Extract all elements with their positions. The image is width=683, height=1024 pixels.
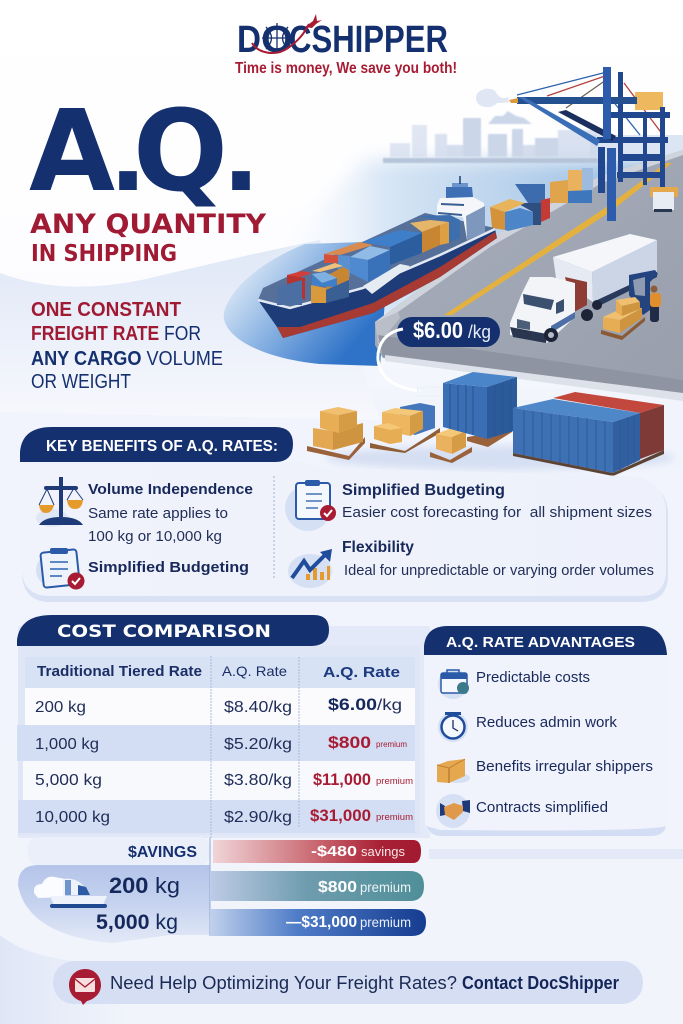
harbour illustration (224, 67, 683, 476)
subtitle: IN SHIPPING (31, 241, 177, 267)
logo swoosh (252, 24, 309, 53)
crane (509, 67, 670, 221)
savings bar (213, 840, 421, 863)
ship containers (277, 215, 460, 305)
advantages header text: A.Q. RATE ADVANTAGES (446, 634, 635, 651)
simplified budgeting heading left: Simplified Budgeting (88, 559, 249, 576)
volume independence heading: Volume Independence (88, 481, 253, 498)
price text: $6.00 (413, 317, 463, 343)
table row 5,000 kg (23, 761, 415, 800)
icon: handshake (436, 794, 470, 828)
quay (375, 150, 683, 401)
benefits header (20, 427, 293, 462)
comparison header text: COST COMPARISON (57, 622, 271, 642)
advantage: contracts simplified: Contracts simplified (476, 800, 608, 816)
premium bar 31,000: premium (360, 914, 411, 930)
title: A (29, 87, 115, 217)
icon: clipboard (36, 548, 84, 590)
volume independence text: Same rate applies to (88, 506, 228, 522)
icon: calendar (438, 669, 469, 699)
table row 1,000 kg: $5.20/kg (224, 736, 292, 753)
dockside containers (490, 168, 593, 231)
container ship (258, 176, 497, 338)
truck (510, 234, 657, 343)
weight rows background (18, 865, 210, 943)
description: ANY CARGO VOLUME (31, 348, 223, 370)
price tag (397, 317, 500, 347)
icon: growth chart (288, 549, 332, 588)
logo wordmark: O (261, 19, 293, 61)
pallets with boxes (307, 403, 512, 463)
trailer (553, 234, 657, 308)
table row 1,000 kg: $800 (328, 733, 371, 752)
200 kg label: 200 kg (109, 873, 180, 898)
table header row (25, 657, 415, 688)
table row 1,000 kg (17, 725, 415, 761)
icon: clipboard right (285, 480, 336, 531)
hook (418, 387, 442, 396)
sea (262, 160, 683, 330)
logo (235, 14, 457, 77)
description: FREIGHT RATE FOR (31, 323, 201, 345)
steam cloud (476, 89, 509, 107)
table header row: A.Q. Rate (222, 663, 287, 679)
table row 1,000 kg: 1,000 kg (35, 736, 99, 753)
small truck on quay (650, 187, 678, 212)
premium bar 31,000 (211, 909, 426, 936)
decorative strip (429, 849, 683, 859)
globe lines (262, 23, 292, 52)
benefits header text: KEY BENEFITS OF A.Q. RATES: (46, 438, 278, 455)
title (29, 87, 260, 217)
table row 200 kg: $8.40/kg (224, 699, 292, 716)
volume independence text: 100 kg or 10,000 kg (88, 529, 222, 545)
comparison header (17, 615, 329, 646)
call to action link: Contact DocShipper (462, 973, 619, 993)
5,000 kg label: 5,000 kg (96, 911, 178, 934)
table row 10,000 kg: premium (376, 812, 413, 822)
subtitle (30, 209, 266, 267)
icon: scales (36, 477, 83, 527)
savings label row: $AVINGS (128, 844, 197, 861)
table row 200 kg: 200 kg (35, 699, 86, 716)
table header row: Traditional Tiered Rate (37, 664, 202, 680)
background wave (0, 240, 380, 420)
logo wordmark (237, 19, 448, 61)
logo wordmark: D (237, 19, 261, 61)
volume independence text (88, 506, 228, 545)
table header row: A.Q. Rate (323, 664, 400, 681)
logo wordmark: CSHIPPER (289, 19, 448, 61)
logo tagline: Time is money, We save you both! (235, 60, 457, 77)
icon: boat and cloud (34, 877, 107, 908)
table row 5,000 kg: 5,000 kg (35, 772, 102, 789)
sea swoosh around bow (224, 240, 420, 366)
ship superstructure (437, 176, 485, 240)
savings label row (28, 837, 210, 865)
cab (510, 277, 575, 343)
premium bar 800 (211, 871, 424, 901)
advantage: reduces admin work: Reduces admin work (476, 715, 618, 731)
panel: cost comparison (17, 615, 430, 838)
table row 5,000 kg: premium (376, 776, 413, 786)
title: . (109, 97, 147, 214)
description (31, 299, 223, 393)
icon: parcel (437, 759, 470, 783)
price unit: /kg (468, 322, 491, 342)
advantage: benefits irregular shippers: Benefits irregular shippers (476, 759, 653, 775)
table row 5,000 kg: $3.80/kg (224, 772, 292, 789)
savings bar: -$480 (311, 843, 357, 860)
description: ONE CONSTANT (31, 299, 181, 321)
large blue container (513, 399, 664, 476)
title: Q (133, 87, 228, 217)
table row 1,000 kg: premium (376, 739, 407, 749)
connector line from price tag to containers (378, 329, 420, 391)
premium bar 800: $800 (318, 879, 357, 896)
advantages header (424, 626, 667, 655)
table row 10,000 kg (18, 800, 415, 833)
savings chart (18, 837, 426, 943)
logo plane (305, 14, 322, 28)
table row 10,000 kg: $2.90/kg (224, 809, 292, 826)
forklift and worker (629, 270, 661, 322)
red container (553, 392, 664, 459)
table row 200 kg (25, 688, 415, 725)
benefits background (22, 462, 668, 602)
sea far band (590, 135, 683, 161)
flexibility text: Ideal for unpredictable or varying order volumes (344, 563, 654, 579)
icon: mail bubble (69, 969, 101, 1005)
call to action text: Need Help Optimizing Your Freight Rates? (110, 973, 457, 993)
savings bar: savings (361, 844, 405, 859)
flexibility heading: Flexibility (342, 539, 414, 556)
skyline (383, 111, 598, 163)
table row 5,000 kg: $11,000 (313, 770, 371, 789)
advantage: predictable costs: Predictable costs (476, 670, 590, 686)
table row 200 kg: $6.00 (328, 695, 377, 714)
simplified budgeting heading right: Simplified Budgeting (342, 482, 505, 499)
subtitle: ANY QUANTITY (30, 209, 266, 240)
background bottom swoosh (0, 935, 130, 1024)
table row 200 kg: /kg (377, 697, 402, 714)
standing blue container (443, 372, 517, 439)
pallet on quay (601, 297, 645, 340)
table row 10,000 kg: $31,000 (310, 806, 371, 825)
premium bar 800: premium (360, 879, 411, 895)
icon: stopwatch (438, 712, 468, 742)
table row 10,000 kg: 10,000 kg (35, 809, 110, 826)
premium bar 31,000: —$31,000 (286, 914, 357, 931)
call to action (53, 961, 643, 1005)
title: . (222, 97, 260, 214)
panel: rate advantages (424, 626, 667, 836)
container shadow (325, 446, 675, 470)
simplified budgeting text right: Easier cost forecasting for all shipment sizes (342, 505, 652, 521)
description: OR WEIGHT (31, 371, 131, 393)
panel: key benefits (20, 427, 668, 602)
